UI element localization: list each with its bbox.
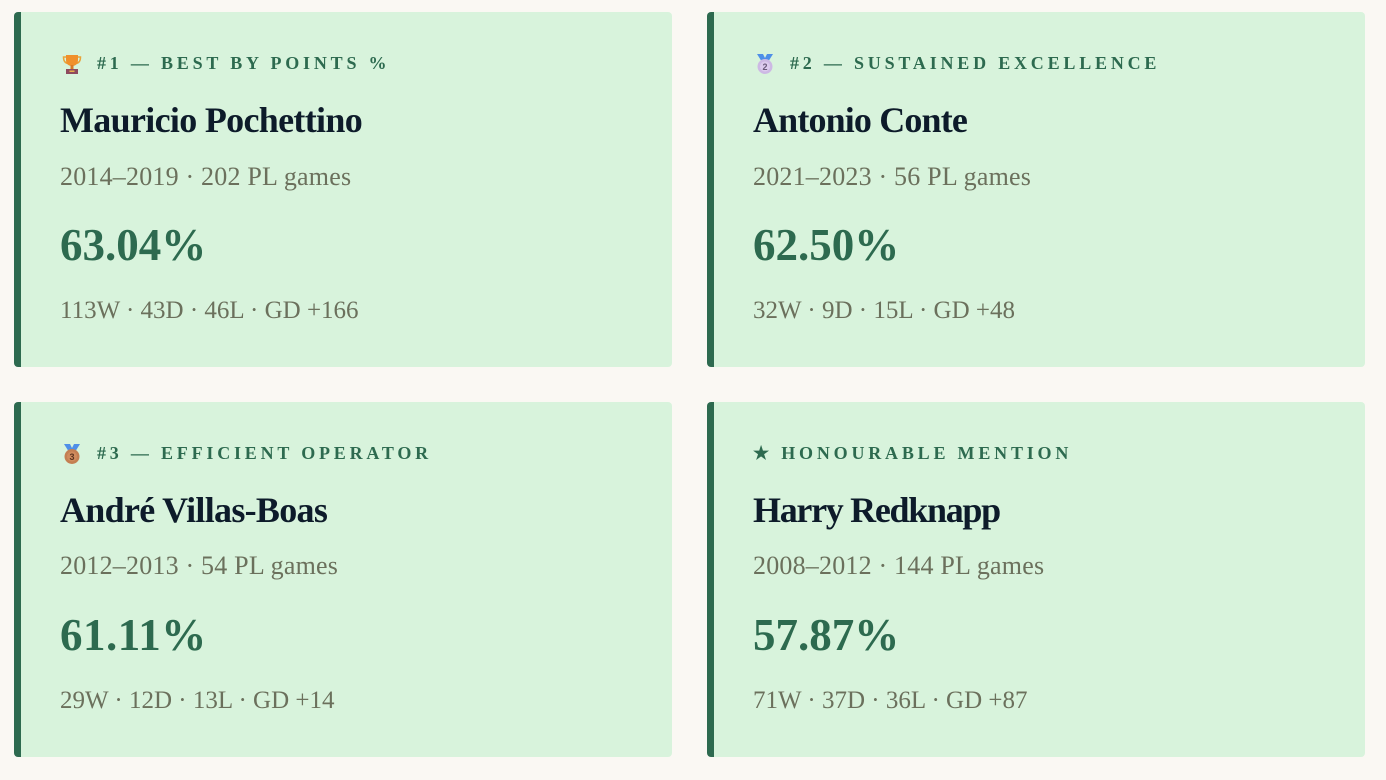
- icon: bronze medal: [64, 444, 80, 464]
- icon: bronze medal: 3: [69, 452, 75, 462]
- manager name: Harry Redknapp: [753, 490, 1000, 530]
- tenure: 2021–2023 · 56 PL games: [753, 162, 1031, 191]
- points percentage: 57.87%: [753, 610, 899, 660]
- points percentage: 61.11%: [60, 610, 207, 660]
- tenure: 2014–2019 · 202 PL games: [60, 162, 351, 191]
- label: rank 3: #3 — EFFICIENT OPERATOR: [97, 443, 432, 463]
- panel: Mauricio Pochettino card: [14, 12, 672, 367]
- icon: trophy: [62, 55, 82, 74]
- manager name: André Villas-Boas: [60, 490, 327, 530]
- icon: silver medal: [757, 54, 773, 74]
- tenure: 2012–2013 · 54 PL games: [60, 551, 338, 580]
- manager name: Mauricio Pochettino: [60, 100, 362, 140]
- record: 71W · 37D · 36L · GD +87: [753, 687, 1027, 714]
- tenure: 2008–2012 · 144 PL games: [753, 551, 1044, 580]
- manager name: Antonio Conte: [753, 100, 967, 140]
- label: rank 2: #2 — SUSTAINED EXCELLENCE: [790, 53, 1160, 73]
- label: rank 1: #1 — BEST BY POINTS %: [97, 53, 390, 73]
- icon: silver medal: 2: [762, 62, 768, 72]
- points percentage: 63.04%: [60, 220, 206, 270]
- label: honourable mention: ★ HONOURABLE MENTION: [753, 443, 1072, 463]
- panel: André Villas-Boas card: [14, 402, 672, 757]
- panel: Antonio Conte card: [707, 12, 1365, 367]
- panel: Harry Redknapp card: [707, 402, 1365, 757]
- record: 29W · 12D · 13L · GD +14: [60, 687, 334, 714]
- points percentage: 62.50%: [753, 220, 899, 270]
- record: 32W · 9D · 15L · GD +48: [753, 297, 1015, 324]
- record: 113W · 43D · 46L · GD +166: [60, 297, 359, 324]
